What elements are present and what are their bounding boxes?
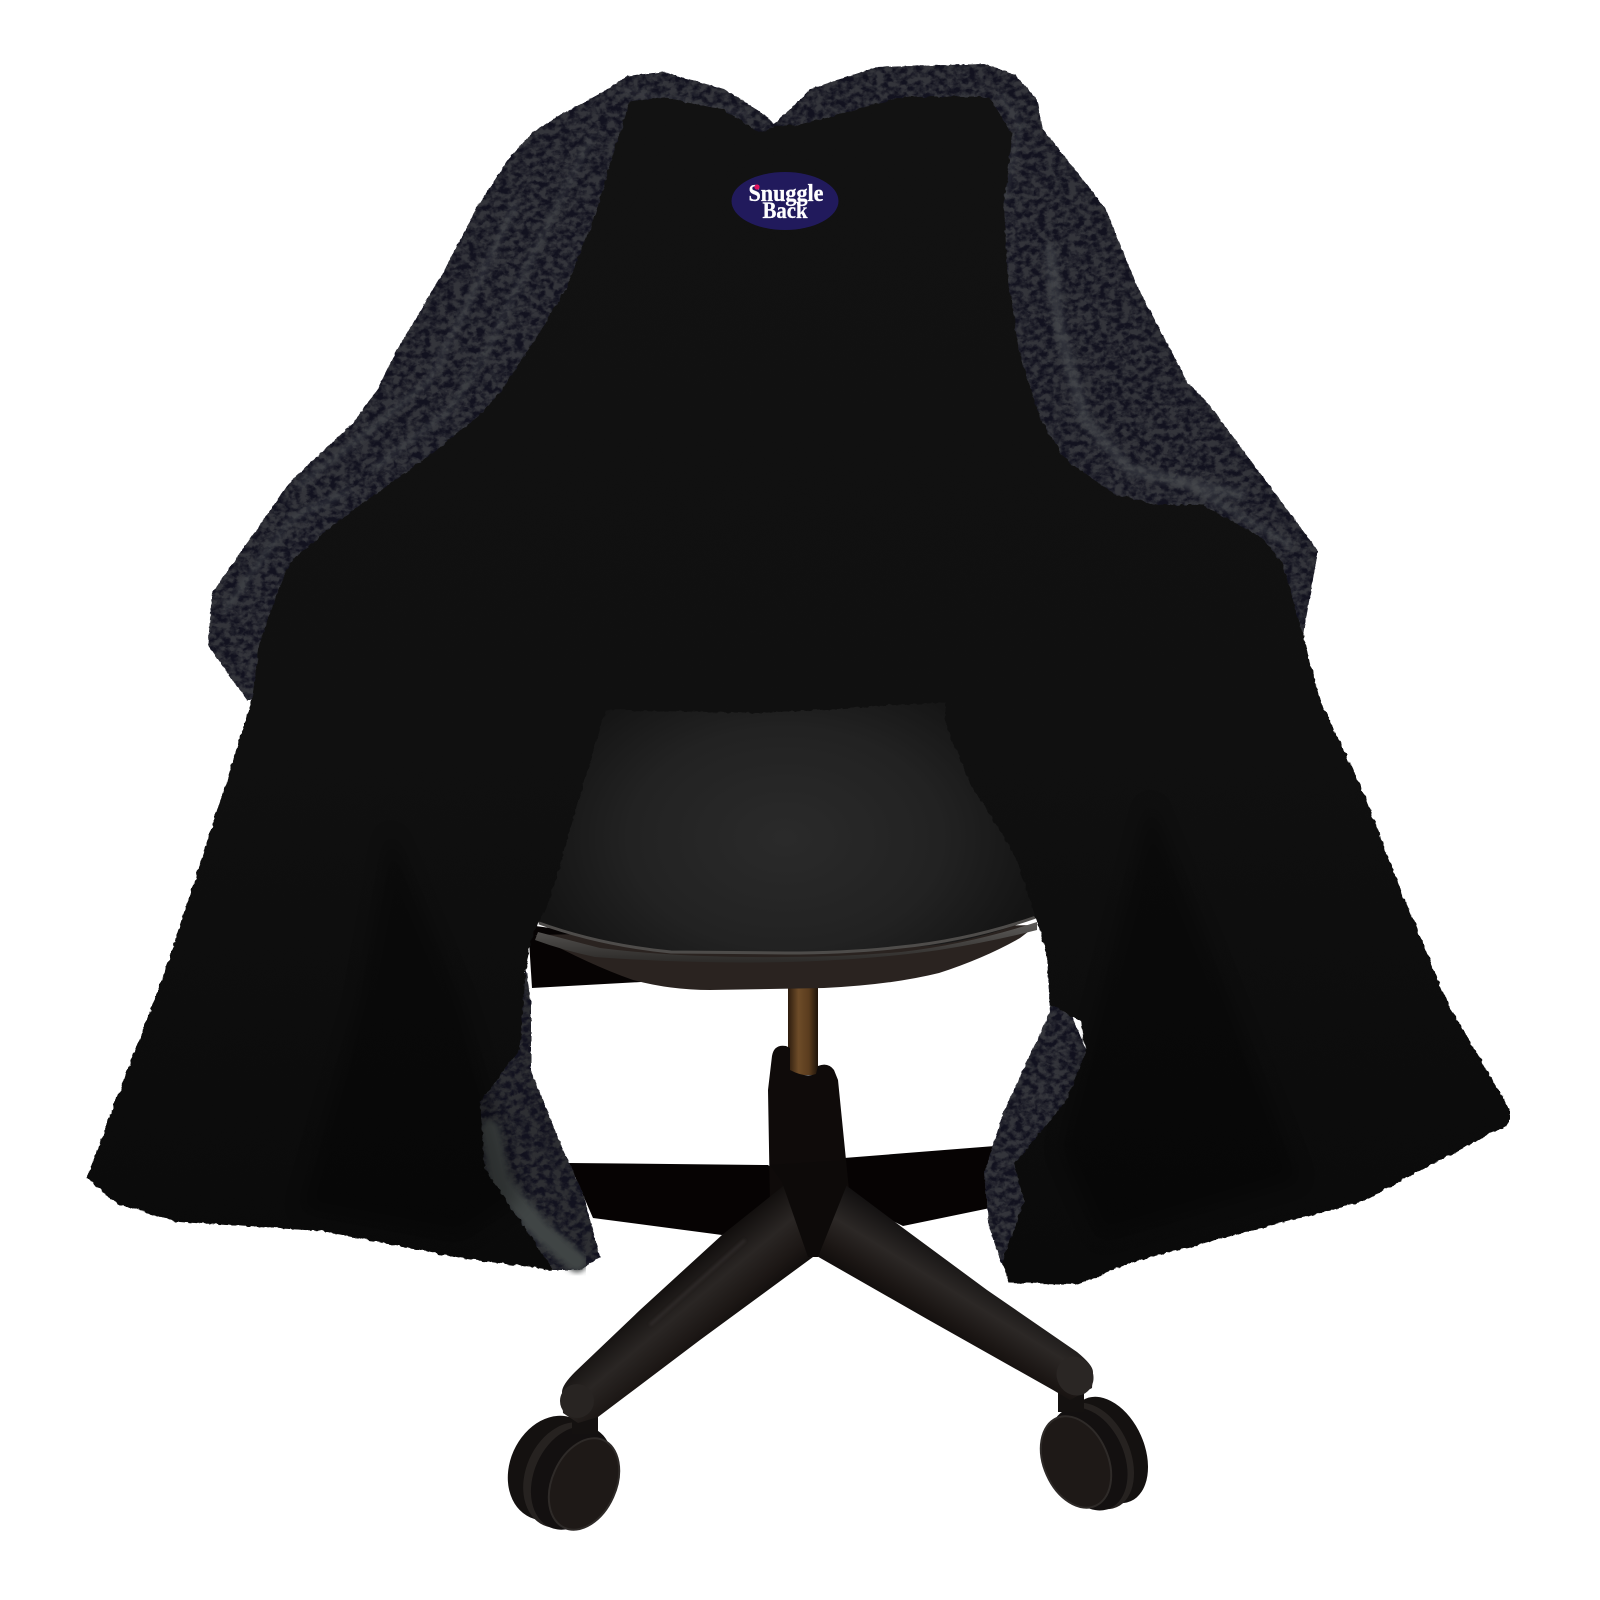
chair front right leg xyxy=(808,1183,1101,1402)
chair gas lift stem xyxy=(788,985,818,1075)
chair seat piping xyxy=(535,917,1037,962)
chair seat shell xyxy=(535,925,1037,990)
chair seat cushion xyxy=(530,695,1045,954)
grey fur lining: lower left flap xyxy=(478,968,600,1270)
logo wordmark: Snuggle: Snuggle xyxy=(748,181,824,207)
grey fur lining: shoulders and hood xyxy=(208,64,1318,700)
Snuggle Back logo badge xyxy=(732,172,838,230)
logo pink dot xyxy=(754,184,760,190)
chair front left leg xyxy=(560,1183,818,1423)
chair right caster xyxy=(1027,1384,1164,1523)
black sherpa blanket body xyxy=(87,97,1509,1285)
grey fur lining: lower right flap xyxy=(984,954,1090,1265)
blanket sherpa shading xyxy=(300,800,1300,1240)
chair left caster xyxy=(492,1402,633,1543)
chair back base legs xyxy=(569,1146,995,1235)
logo wordmark: Back: Back xyxy=(762,198,808,223)
chair base hub xyxy=(770,1160,848,1257)
chair cylinder sleeve xyxy=(768,1046,850,1205)
chair under-seat bracket xyxy=(528,925,641,988)
